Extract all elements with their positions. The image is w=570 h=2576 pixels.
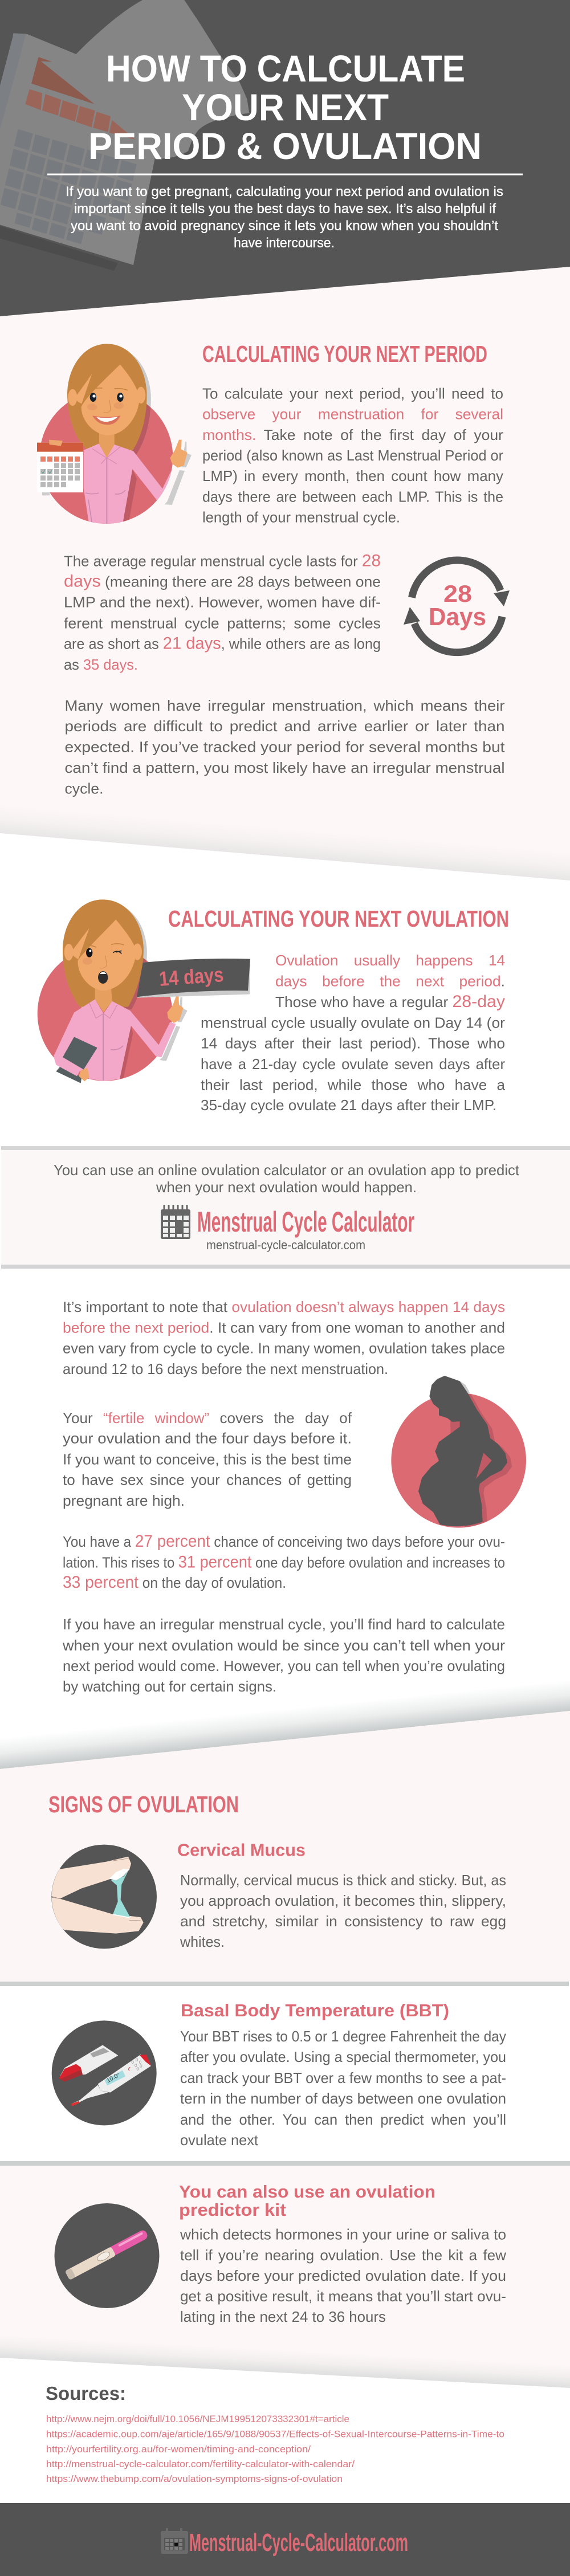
title: YOUR NEXT (182, 86, 389, 128)
panel: signs of ovulation (47, 1791, 506, 2325)
section background: cream predictor section (0, 2166, 570, 2388)
icon: cervical mucus fingers (47, 1845, 157, 1949)
text block: how to calculate: length of your menstrual cycle. (202, 508, 400, 525)
text block: average cycle: LMP and the next). However, women have dif- (64, 594, 381, 611)
text block: predictor kit: which detects hormones in your urine or saliva to (180, 2226, 506, 2243)
illustration: pregnant silhouette (391, 1376, 526, 1531)
text block: irregular cycle: If you have an irregular menstrual cycle, you’ll find hard to calculate (63, 1616, 505, 1633)
panel: calculating next period (37, 341, 510, 797)
text block: ovulation varies: around 12 to 16 days before the next menstruation. (63, 1360, 388, 1377)
text block: calculator note (54, 1161, 520, 1196)
text block: ovulation timing: menstrual cycle usually ovulate on Day 14 (or (201, 1014, 505, 1032)
text block: irregular menstruation (65, 697, 505, 797)
text block: BBT: Your BBT rises to 0.5 or 1 degree Fahrenheit the day (180, 2028, 506, 2045)
header panel (0, 0, 570, 316)
text block: ovulation varies (63, 1298, 505, 1377)
intro text: have intercourse. (234, 235, 335, 251)
text block: predictor kit (180, 2226, 506, 2325)
text block: average cycle (64, 551, 381, 673)
logo url: menstrual-cycle-calculator.com (206, 1238, 365, 1252)
shadow band above first diagonal (0, 805, 570, 881)
text block: BBT: and the other. You can then predict when you’ll (180, 2111, 506, 2128)
text block: how to calculate: period (also known as Last Menstrual Period or (202, 447, 503, 464)
subheading (179, 2182, 435, 2220)
text block: irregular cycle (62, 1616, 505, 1695)
intro text: If you want to get pregnant, calculating your next period and ovulation is (66, 184, 503, 199)
heading: SIGNS OF OVULATION (48, 1791, 239, 1817)
text block: average cycle: The average regular menstrual cycle lasts for 28 (64, 551, 381, 570)
text block: predictor kit: days before your predicted ovulation date. If you (180, 2267, 506, 2284)
source list: http://yourfertility.org.au/for-women/timing-and-conception/ (46, 2444, 311, 2455)
text block: conception chances (63, 1532, 505, 1592)
text block: irregular cycle: next period would come. However, you can tell when you’re ovulating (63, 1657, 505, 1674)
text block: how to calculate: days there are between each LMP. This is the (202, 488, 503, 505)
text block: ovulation varies: even vary from cycle to cycle. In many women, ovulation takes place (63, 1339, 505, 1356)
text block: BBT (180, 2028, 506, 2149)
text block: ovulation timing: have a 21-day cycle ovulate seven days after (201, 1055, 505, 1073)
text block: mucus: Normally, cervical mucus is thick and sticky. But, as (180, 1872, 506, 1889)
illustration: woman with calendar (37, 344, 192, 526)
icon: footer calendar (161, 2528, 188, 2554)
text block: conception chances: lation. This rises to 31 percent one day before ovulation and increases to (63, 1552, 505, 1572)
section background: cream period section (0, 262, 570, 889)
text block: ovulation timing: days before the next period. (275, 972, 505, 989)
logo text: Menstrual Cycle Calculator (197, 1206, 414, 1238)
text block: how to calculate: To calculate your next period, you’ll need to (202, 385, 503, 402)
shadow band above second diagonal (0, 1680, 570, 1769)
text block: irregular menstruation: Many women have irregular menstruation, which means their (65, 697, 505, 714)
footer (0, 2503, 570, 2576)
icon: background calendar (0, 0, 249, 271)
text block: irregular cycle: by watching out for certain signs. (63, 1678, 276, 1695)
section background: cream signs section (0, 1711, 570, 1982)
text block: ovulation timing: Ovulation usually happens 14 (275, 952, 505, 969)
icon: calendar logo (161, 1205, 190, 1239)
text block: fertile window: your ovulation and the four days before it. (63, 1430, 352, 1447)
panel: sources (46, 2383, 504, 2484)
text block: mucus: you approach ovulation, it becomes thin, slippery, (180, 1892, 506, 1909)
text block: conception chances: You have a 27 percent chance of conceiving two days before your ovu- (63, 1532, 505, 1551)
panel: ovulation details (62, 1298, 526, 1695)
text block: irregular menstruation: can’t find a pattern, you most likely have an irregular menstrual (65, 759, 505, 776)
text block: BBT: can track your BBT over a few months to see a pat- (180, 2069, 506, 2086)
text block: fertile window: Your “fertile window” covers the day of (63, 1409, 352, 1426)
text block: average cycle: ferent menstrual cycle patterns; some cycles (64, 614, 381, 631)
text block: ovulation timing (201, 952, 506, 1114)
icon: thermometer: 10.0° (105, 2072, 121, 2084)
text block: how to calculate (202, 385, 503, 525)
text block: average cycle: as 35 days. (64, 656, 138, 673)
text block: calculator note: when your next ovulation would happen. (156, 1179, 417, 1196)
intro text (66, 184, 503, 251)
subheading: Basal Body Temperature (BBT) (181, 2000, 449, 2020)
subheading: predictor kit (179, 2200, 286, 2220)
text block: fertile window: pregnant are high. (63, 1492, 185, 1509)
text block: BBT: after you ovulate. Using a special thermometer, you (180, 2048, 506, 2065)
text block: how to calculate: months. Take note of the first day of your (202, 426, 503, 443)
source list: https://www.thebump.com/a/ovulation-symptoms-signs-of-ovulation (46, 2473, 343, 2484)
intro text: important since it tells you the best days to have sex. It’s also helpful if (74, 201, 496, 217)
text block: irregular cycle: when your next ovulation would be since you can’t tell when your (62, 1637, 505, 1654)
text block: irregular menstruation: expected. If you’ve tracked your period for several months but (65, 739, 505, 756)
panel: calculating next ovulation (38, 899, 509, 1114)
icon: 28 days cycle: 28 (443, 580, 472, 607)
text block: predictor kit: tell if you’re nearing ovulation. Use the kit a few (180, 2247, 506, 2264)
text block: predictor kit: get a positive result, it means that you’ll start ovu- (180, 2288, 506, 2305)
icon: 28 days cycle (404, 560, 510, 653)
text block: irregular menstruation: cycle. (65, 780, 104, 797)
text block: how to calculate: LMP) in every month, then count how many (202, 467, 503, 484)
source list: https://academic.oup.com/aje/article/165/9/1088/90537/Effects-of-Sexual-Intercourse-Patterns-in-Time-to (46, 2429, 504, 2440)
shadow band above third diagonal (0, 2335, 570, 2388)
source list: http://menstrual-cycle-calculator.com/fertility-calculator-with-calendar/ (46, 2459, 355, 2469)
section background: white ovulation section (0, 833, 570, 1147)
text block: mucus: whites. (180, 1933, 225, 1950)
text block: how to calculate: observe your menstruation for several (202, 406, 503, 423)
text block: mucus: and stretchy, similar in consistency to raw egg (180, 1913, 506, 1930)
intro text: you want to avoid pregnancy since it lets you know when you shouldn’t (71, 218, 498, 234)
text block: irregular menstruation: periods are difficult to predict and arrive earlier or later than (65, 718, 505, 735)
icon: ovulation test stick (55, 2203, 160, 2308)
illustration: woman with 14 days banner (38, 899, 250, 1083)
text block: fertile window: If you want to conceive, this is the best time (63, 1450, 352, 1468)
title: PERIOD & OVULATION (88, 125, 482, 167)
text block: ovulation timing: 14 days after their last period). Those who (201, 1034, 505, 1051)
subheading: You can also use an ovulation (179, 2182, 435, 2202)
text block: fertile window: to have sex since your chances of getting (63, 1472, 352, 1489)
title (88, 47, 482, 167)
text block: ovulation varies: before the next period. It can vary from one woman to another and (63, 1319, 505, 1336)
text block: BBT: ovulate next (180, 2131, 259, 2149)
text block: mucus (180, 1872, 506, 1950)
text block: ovulation timing: 35-day cycle ovulate 21 days after their LMP. (201, 1097, 496, 1114)
text block: fertile window (63, 1409, 352, 1509)
text block: calculator note: You can use an online ovulation calculator or an ovulation app to predict (54, 1161, 520, 1179)
text block: BBT: tern in the number of days between one ovulation (180, 2090, 506, 2107)
icon: 28 days cycle: Days (429, 603, 486, 631)
source list (46, 2414, 504, 2484)
text block: ovulation timing: their last period, while those who have a (201, 1076, 506, 1093)
text block: ovulation timing: Those who have a regular 28-day (275, 992, 505, 1011)
panel: online calculator (54, 1161, 520, 1252)
text block: predictor kit: lating in the next 24 to 36 hours (180, 2308, 386, 2325)
source list: http://www.nejm.org/doi/full/10.1056/NEJM199512073332301#t=article (46, 2414, 349, 2424)
text block: average cycle: days (meaning there are 28 days between one (64, 572, 381, 591)
subheading: Cervical Mucus (177, 1840, 306, 1860)
title: HOW TO CALCULATE (106, 47, 465, 89)
text block: ovulation varies: It’s important to note that ovulation doesn’t always happen 14 days (63, 1298, 505, 1315)
heading: Sources: (46, 2383, 126, 2404)
section background: calculator band (1, 1150, 570, 1265)
text block: conception chances: 33 percent on the day of ovulation. (63, 1573, 286, 1592)
icon: thermometer (52, 2020, 157, 2125)
text block: average cycle: are as short as 21 days, while others are as long (64, 634, 381, 653)
illustration: woman with 14 days banner: 14 days (158, 963, 225, 991)
footer logo text: Menstrual-Cycle-Calculator.com (189, 2529, 408, 2557)
